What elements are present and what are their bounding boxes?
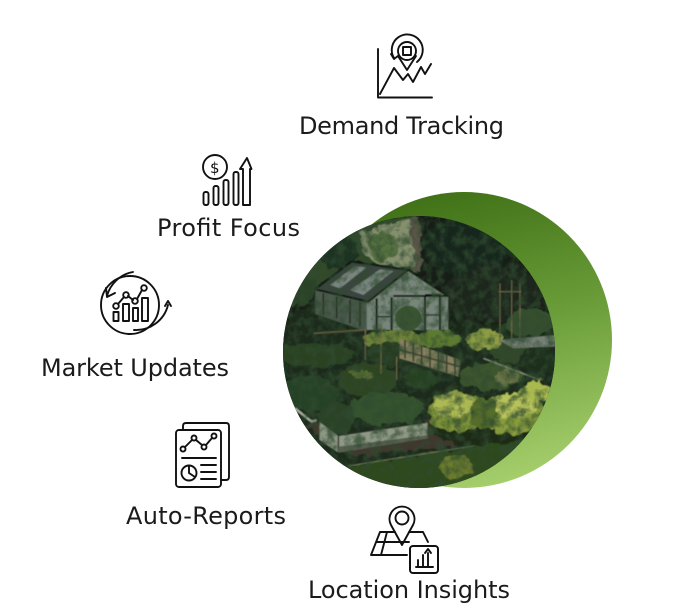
garden photo circle xyxy=(283,216,555,488)
label: profit focus: Profit Focus xyxy=(157,214,300,242)
label: location insights: Location Insights xyxy=(308,576,510,604)
path and shrubs xyxy=(300,381,557,457)
icon: profit focus: $ xyxy=(210,159,220,177)
lawn xyxy=(348,440,521,488)
icon: location insights xyxy=(371,507,438,573)
label: auto-reports: Auto-Reports xyxy=(126,502,286,530)
icon: market updates xyxy=(101,272,171,334)
green crescent circle xyxy=(316,192,612,488)
label: market updates: Market Updates xyxy=(41,354,229,382)
icon: profit focus xyxy=(203,155,252,205)
background trees and sky xyxy=(286,216,552,328)
icon: demand tracking xyxy=(378,34,432,98)
raised bed xyxy=(295,408,473,466)
icon: auto reports xyxy=(176,423,229,487)
fences and stakes xyxy=(313,280,555,380)
garden beds xyxy=(283,306,555,468)
label: demand tracking: Demand Tracking xyxy=(299,112,504,140)
greenhouse xyxy=(315,262,448,332)
